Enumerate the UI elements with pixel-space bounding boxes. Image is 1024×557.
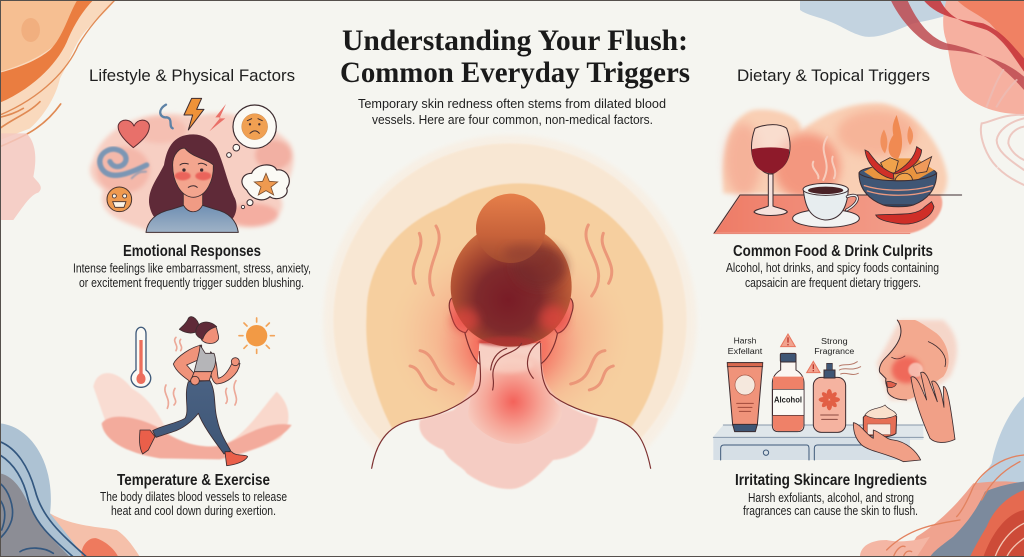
coffee cup: [793, 183, 859, 227]
panel: skincare: [713, 320, 957, 518]
panel: emotional responses: [73, 98, 311, 290]
bowl of chilies: [859, 147, 937, 207]
blue swirl: [100, 149, 147, 178]
exfoliant tube: [727, 363, 763, 432]
face flush backdrop: [877, 320, 957, 400]
title: Common Everyday Triggers: [340, 56, 690, 89]
chest flush: [419, 343, 598, 489]
body text: heat and cool down during exertion.: [111, 504, 276, 518]
title: Understanding Your Flush:: [342, 24, 688, 57]
illustration: stressed woman with emotion icons: [90, 98, 294, 232]
body text: The body dilates blood vessels to release: [100, 490, 287, 504]
subtitle: Temporary skin redness often stems from dilated blood: [358, 96, 666, 111]
sun: [239, 318, 274, 353]
central illustration: back of head with flush: [323, 135, 697, 543]
ears: [449, 297, 573, 333]
subtitle: vessels. Here are four common, non-medical factors.: [372, 112, 653, 127]
heading: Irritating Skincare Ingredients: [735, 472, 927, 489]
body text: [73, 262, 311, 290]
corner art: top left watercolour: [0, 0, 115, 220]
fragrance bottle: [813, 362, 861, 432]
heat waves: [165, 337, 236, 408]
subtitle: [358, 96, 666, 127]
body text: Alcohol, hot drinks, and spicy foods containing: [726, 261, 939, 275]
shoulders and neck: [363, 360, 657, 543]
body text: Harsh exfoliants, alcohol, and strong: [748, 491, 914, 505]
corner art: bottom right watercolour: [860, 397, 1024, 557]
star thought cloud: [241, 165, 289, 209]
face in profile: [879, 320, 949, 400]
section heading: left: Lifestyle & Physical Factors: [89, 67, 295, 85]
runner: [139, 317, 248, 466]
illustration: wine, coffee and chili bowl: [714, 103, 962, 233]
wine glass: [752, 125, 790, 215]
title: [340, 24, 690, 89]
lightning bolt red: [209, 104, 226, 131]
small product labels: Strong: [821, 337, 848, 346]
head: [451, 194, 572, 347]
body text: fragrances can cause the skin to flush.: [743, 504, 918, 518]
small product labels: Harsh: [734, 336, 756, 345]
worried face thought bubble: [227, 105, 276, 157]
body text: [743, 491, 918, 518]
table: [714, 195, 962, 233]
body text: [100, 490, 287, 518]
halo: [323, 135, 697, 508]
body text: capsaicin are frequent dietary triggers.: [745, 276, 921, 290]
angry face: [107, 187, 132, 212]
thermometer: [131, 327, 151, 387]
heat waves: [410, 225, 613, 390]
warning triangles: [781, 334, 820, 373]
lightning bolt orange: [184, 98, 204, 130]
heart: [118, 120, 149, 148]
small product labels: Fragrance: [814, 347, 855, 356]
corner art: top right watercolour: [800, 0, 1024, 185]
warm glow backdrop: [723, 103, 947, 200]
illustration: products and face: [713, 320, 957, 462]
body text: or excitement frequently trigger sudden blushing.: [79, 276, 304, 290]
section heading: right: Dietary & Topical Triggers: [737, 67, 930, 85]
woman: [146, 134, 238, 232]
steam: [813, 137, 835, 180]
pink emotion cloud: [90, 113, 294, 232]
small product labels: Exfellant: [728, 347, 763, 356]
flames: [880, 115, 913, 158]
shelf: [713, 425, 923, 460]
body text: Intense feelings like embarrassment, stress, anxiety,: [73, 262, 311, 276]
alcohol bottle: [772, 353, 804, 432]
corner art: bottom left watercolour: [0, 423, 140, 557]
alcohol bottle: Alcohol: [774, 395, 802, 404]
chili on table: [876, 202, 934, 224]
hand with cream jar: [853, 405, 921, 462]
heading: Temperature & Exercise: [117, 472, 270, 489]
small product labels: [728, 336, 855, 356]
panel: temperature and exercise: [93, 317, 292, 518]
pink ground blobs: [93, 373, 292, 459]
panel: food and drink: [714, 103, 962, 290]
blue squiggle: [160, 105, 173, 128]
right hand on cheek: [911, 372, 955, 442]
heading: Common Food & Drink Culprits: [733, 243, 933, 260]
heading: Emotional Responses: [123, 243, 261, 260]
illustration: runner, thermometer and sun: [93, 317, 292, 466]
body text: [726, 261, 939, 290]
neck contour lines: [372, 333, 651, 468]
